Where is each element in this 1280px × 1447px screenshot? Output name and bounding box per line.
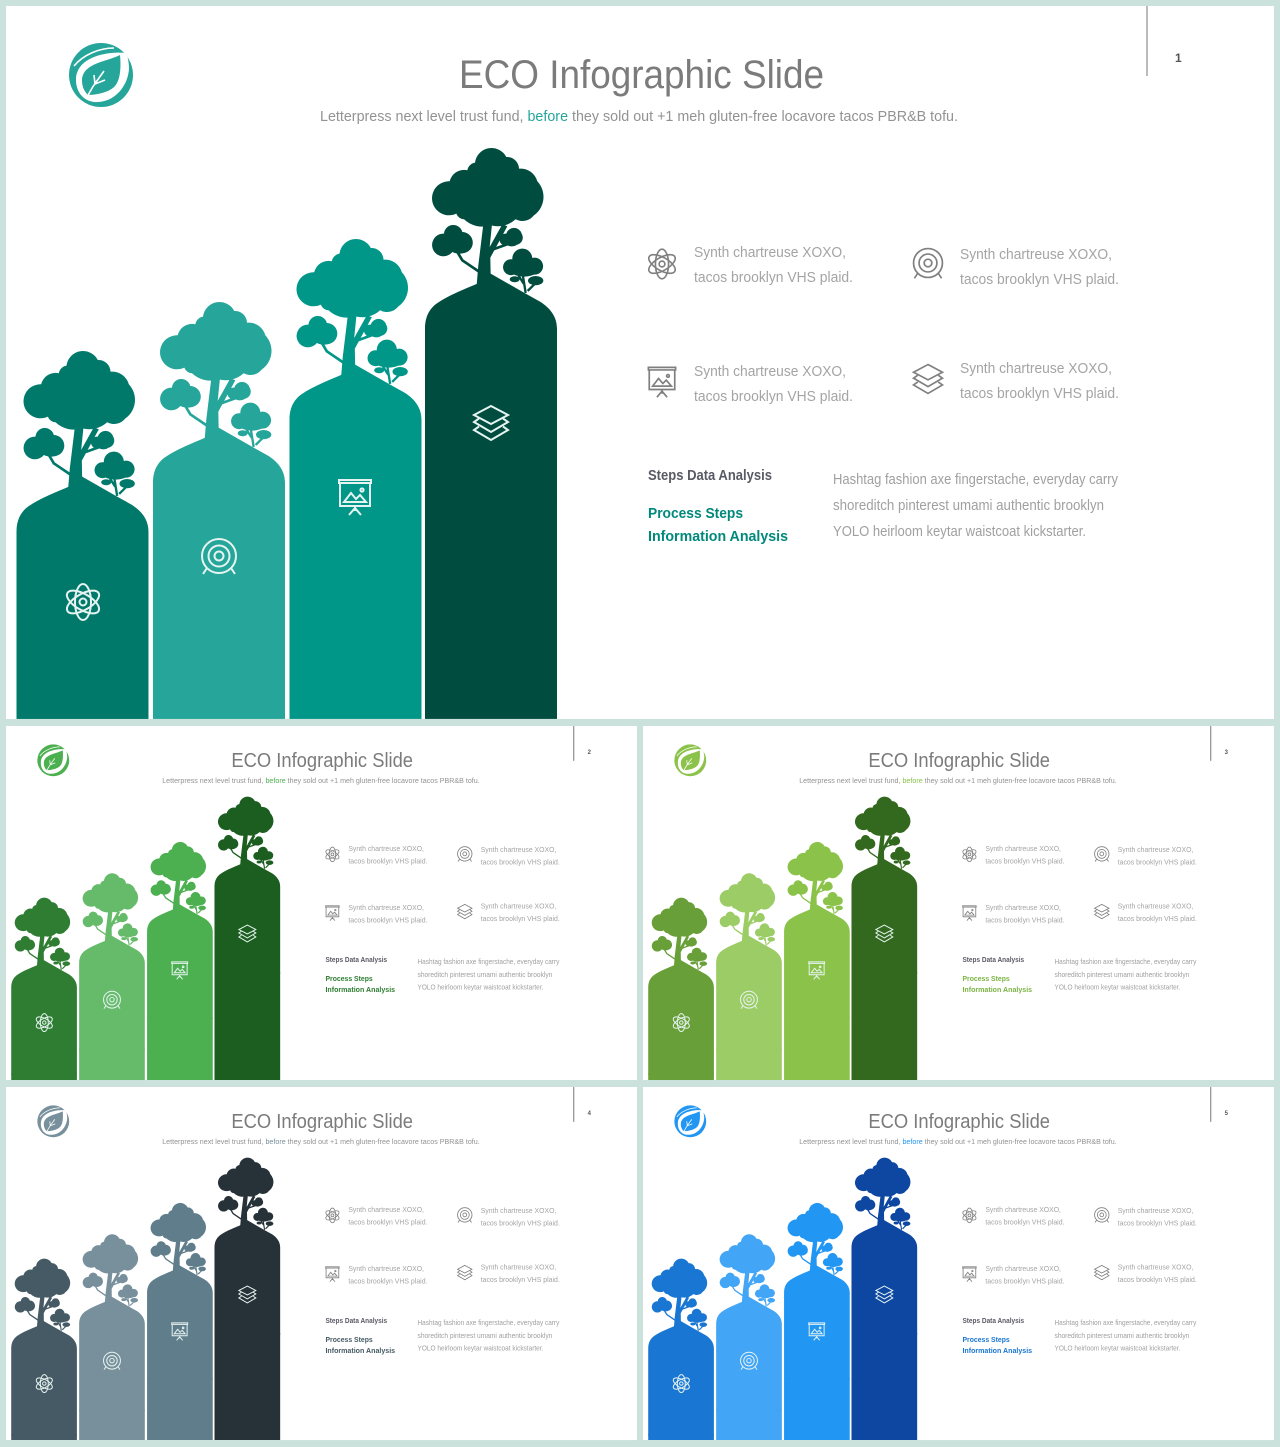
icon: atom (63, 584, 103, 620)
feature: layers item: tacos brooklyn VHS plaid. (1118, 914, 1197, 923)
feature: layers item: Synth chartreuse XOXO, (1118, 1263, 1193, 1272)
analysis headings: Steps Data Analysis (648, 467, 772, 484)
analysis headings: Process Steps (325, 1335, 373, 1344)
feature: presentation item: Synth chartreuse XOXO, (348, 903, 424, 912)
analysis headings: Information Analysis (325, 985, 395, 994)
feature: atom item: tacos brooklyn VHS plaid. (985, 1217, 1064, 1226)
feature: target item: Synth chartreuse XOXO, (1118, 1206, 1193, 1215)
feature: target item (458, 1206, 560, 1227)
feature: atom item (324, 844, 427, 865)
feature: presentation item: tacos brooklyn VHS plaid. (985, 916, 1064, 925)
analysis headings (648, 467, 788, 545)
feature: atom item: tacos brooklyn VHS plaid. (348, 1217, 427, 1226)
icon: layers (876, 925, 893, 942)
bar 4 with tree (214, 797, 280, 1080)
icon: target (741, 1352, 757, 1370)
analysis paragraph: shoreditch pinterest umami authentic brooklyn (833, 497, 1104, 514)
feature: presentation item (963, 903, 1064, 925)
feature: presentation item (648, 363, 853, 405)
analysis headings (962, 1316, 1032, 1355)
feature: layers item (458, 1263, 560, 1284)
icon: presentation (172, 962, 188, 979)
feature: layers item: Synth chartreuse XOXO, (1118, 902, 1193, 911)
bar 2 with tree (716, 1234, 782, 1440)
icon: target (104, 1352, 120, 1370)
subtitle: Letterpress next level trust fund, before they sold out +1 meh gluten-free locavore tacos PBR&B tofu. (162, 776, 480, 785)
analysis headings: Process Steps (962, 1335, 1010, 1344)
feature: target item: Synth chartreuse XOXO, (481, 1206, 556, 1215)
icon: target (202, 539, 236, 574)
analysis headings (325, 1316, 395, 1355)
icon: layers (474, 406, 508, 440)
icon: layers (239, 1286, 256, 1303)
bar 2 with tree (153, 302, 285, 719)
feature: target item: Synth chartreuse XOXO, (481, 845, 556, 854)
feature: atom item: Synth chartreuse XOXO, (348, 1205, 424, 1214)
page number (573, 726, 592, 761)
feature: presentation item (963, 1264, 1064, 1286)
page number: 4 (588, 1111, 592, 1117)
analysis paragraph: Hashtag fashion axe fingerstache, everyday carry (833, 471, 1118, 488)
bar 2 with tree (79, 1234, 145, 1440)
chart: tree bars (16, 148, 557, 719)
feature: atom item: tacos brooklyn VHS plaid. (985, 856, 1064, 865)
analysis paragraph (1055, 1318, 1197, 1353)
bar 1 with tree (648, 898, 714, 1080)
bar 1 with tree (648, 1259, 714, 1440)
feature: target item: tacos brooklyn VHS plaid. (481, 1218, 560, 1227)
panel: blue grey slide (6, 1087, 637, 1440)
feature: target item: tacos brooklyn VHS plaid. (1118, 857, 1197, 866)
analysis paragraph (418, 1318, 560, 1353)
feature: atom item (324, 1205, 427, 1226)
analysis paragraph: YOLO heirloom keytar waistcoat kickstarter. (1055, 1344, 1180, 1353)
feature: atom item: Synth chartreuse XOXO, (694, 244, 846, 261)
page number (573, 1087, 592, 1122)
feature: layers item: Synth chartreuse XOXO, (481, 902, 556, 911)
bar 1 with tree (16, 351, 148, 719)
analysis headings: Steps Data Analysis (325, 955, 387, 964)
title: ECO Infographic Slide (868, 750, 1050, 772)
page number (1210, 726, 1229, 761)
icon: leaf logo (674, 1105, 706, 1137)
feature: layers item (458, 902, 560, 923)
panel: light green slide (643, 726, 1274, 1080)
feature: layers item: tacos brooklyn VHS plaid. (481, 914, 560, 923)
analysis headings: Process Steps (325, 974, 373, 983)
analysis paragraph: shoreditch pinterest umami authentic brooklyn (418, 970, 552, 979)
analysis paragraph: shoreditch pinterest umami authentic brooklyn (418, 1331, 552, 1340)
feature: target item: tacos brooklyn VHS plaid. (1118, 1218, 1197, 1227)
icon: atom (35, 1375, 54, 1393)
analysis headings: Steps Data Analysis (962, 1316, 1024, 1325)
feature: target item: Synth chartreuse XOXO, (1118, 845, 1193, 854)
page number: 5 (1225, 1111, 1229, 1117)
feature: atom item: Synth chartreuse XOXO, (985, 844, 1061, 853)
icon: target (741, 991, 757, 1009)
icon: atom (35, 1014, 54, 1032)
analysis paragraph: Hashtag fashion axe fingerstache, everyday carry (418, 1318, 560, 1327)
feature: presentation item: tacos brooklyn VHS plaid. (348, 1277, 427, 1286)
feature: target item (914, 246, 1119, 288)
analysis paragraph: Hashtag fashion axe fingerstache, everyday carry (418, 957, 560, 966)
feature: atom item (961, 844, 1064, 865)
bar 3 with tree (784, 842, 850, 1080)
analysis paragraph: YOLO heirloom keytar waistcoat kickstarter. (1055, 983, 1180, 992)
feature: atom item: tacos brooklyn VHS plaid. (348, 856, 427, 865)
analysis paragraph: YOLO heirloom keytar waistcoat kickstarter. (418, 1344, 543, 1353)
bar 3 with tree (289, 239, 421, 719)
icon: leaf logo (37, 1105, 69, 1137)
feature: presentation item: tacos brooklyn VHS plaid. (985, 1277, 1064, 1286)
bar 2 with tree (79, 873, 145, 1080)
analysis paragraph (833, 471, 1118, 540)
bar 2 with tree (716, 873, 782, 1080)
feature: target item (1095, 845, 1197, 866)
bar 4 with tree (851, 1158, 917, 1440)
bar 4 with tree (851, 797, 917, 1080)
feature: presentation item: Synth chartreuse XOXO, (985, 903, 1061, 912)
icon: presentation (339, 480, 371, 515)
panel: main teal slide (6, 6, 1274, 719)
bar 1 with tree (11, 1259, 77, 1440)
analysis headings: Steps Data Analysis (962, 955, 1024, 964)
subtitle: Letterpress next level trust fund, before they sold out +1 meh gluten-free locavore tacos PBR&B tofu. (799, 1137, 1117, 1146)
feature: presentation item: Synth chartreuse XOXO, (694, 363, 846, 380)
analysis paragraph (1055, 957, 1197, 992)
feature: atom item (961, 1205, 1064, 1226)
page number: 3 (1225, 750, 1229, 756)
chart: tree bars (11, 797, 280, 1080)
analysis paragraph: YOLO heirloom keytar waistcoat kickstarter. (833, 523, 1086, 540)
panel: blue slide (643, 1087, 1274, 1440)
analysis paragraph: YOLO heirloom keytar waistcoat kickstarter. (418, 983, 543, 992)
icon: leaf logo (69, 43, 133, 107)
bar 4 with tree (425, 148, 557, 719)
feature: presentation item: Synth chartreuse XOXO, (348, 1264, 424, 1273)
bar 3 with tree (784, 1203, 850, 1440)
bar 1 with tree (11, 898, 77, 1080)
title: ECO Infographic Slide (231, 750, 413, 772)
feature: layers item: tacos brooklyn VHS plaid. (481, 1275, 560, 1284)
feature: atom item (646, 244, 853, 286)
icon: presentation (809, 962, 825, 979)
icon: presentation (172, 1323, 188, 1340)
subtitle: Letterpress next level trust fund, before they sold out +1 meh gluten-free locavore tacos PBR&B tofu. (320, 109, 958, 125)
subtitle: Letterpress next level trust fund, before they sold out +1 meh gluten-free locavore tacos PBR&B tofu. (162, 1137, 480, 1146)
bar 4 with tree (214, 1158, 280, 1440)
icon: layers (239, 925, 256, 942)
icon: layers (876, 1286, 893, 1303)
feature: target item: Synth chartreuse XOXO, (960, 246, 1112, 263)
analysis paragraph: shoreditch pinterest umami authentic brooklyn (1055, 970, 1189, 979)
feature: layers item: tacos brooklyn VHS plaid. (1118, 1275, 1197, 1284)
analysis headings: Information Analysis (962, 985, 1032, 994)
analysis paragraph: shoreditch pinterest umami authentic brooklyn (1055, 1331, 1189, 1340)
analysis paragraph: Hashtag fashion axe fingerstache, everyday carry (1055, 957, 1197, 966)
icon: leaf logo (37, 744, 69, 776)
title: ECO Infographic Slide (231, 1111, 413, 1133)
page number (1210, 1087, 1229, 1122)
feature: layers item: Synth chartreuse XOXO, (481, 1263, 556, 1272)
feature: layers item (1095, 1263, 1197, 1284)
panel: green slide (6, 726, 637, 1080)
subtitle: Letterpress next level trust fund, before they sold out +1 meh gluten-free locavore tacos PBR&B tofu. (799, 776, 1117, 785)
page number (1146, 6, 1182, 76)
feature: layers item (1095, 902, 1197, 923)
analysis headings: Information Analysis (325, 1346, 395, 1355)
analysis headings (325, 955, 395, 994)
bar 3 with tree (147, 842, 213, 1080)
title: ECO Infographic Slide (868, 1111, 1050, 1133)
feature: atom item: Synth chartreuse XOXO, (348, 844, 424, 853)
feature: layers item (914, 360, 1119, 402)
feature: presentation item: Synth chartreuse XOXO, (985, 1264, 1061, 1273)
feature: atom item: Synth chartreuse XOXO, (985, 1205, 1061, 1214)
icon: atom (672, 1014, 691, 1032)
feature: target item: tacos brooklyn VHS plaid. (481, 857, 560, 866)
feature: target item (1095, 1206, 1197, 1227)
analysis headings (962, 955, 1032, 994)
feature: target item (458, 845, 560, 866)
icon: presentation (809, 1323, 825, 1340)
bar 3 with tree (147, 1203, 213, 1440)
page number: 2 (588, 750, 592, 756)
feature: presentation item (326, 1264, 427, 1286)
analysis headings: Process Steps (648, 505, 743, 522)
analysis headings: Information Analysis (962, 1346, 1032, 1355)
analysis paragraph: Hashtag fashion axe fingerstache, everyday carry (1055, 1318, 1197, 1327)
analysis headings: Information Analysis (648, 528, 788, 545)
chart: tree bars (11, 1158, 280, 1440)
feature: presentation item: tacos brooklyn VHS plaid. (694, 388, 853, 405)
page number: 1 (1175, 51, 1182, 65)
feature: presentation item (326, 903, 427, 925)
title: ECO Infographic Slide (459, 53, 824, 97)
icon: leaf logo (674, 744, 706, 776)
chart: tree bars (648, 1158, 917, 1440)
feature: atom item: tacos brooklyn VHS plaid. (694, 269, 853, 286)
analysis paragraph (418, 957, 560, 992)
feature: target item: tacos brooklyn VHS plaid. (960, 271, 1119, 288)
icon: target (104, 991, 120, 1009)
feature: layers item: Synth chartreuse XOXO, (960, 360, 1112, 377)
analysis headings: Process Steps (962, 974, 1010, 983)
feature: presentation item: tacos brooklyn VHS plaid. (348, 916, 427, 925)
analysis headings: Steps Data Analysis (325, 1316, 387, 1325)
icon: atom (672, 1375, 691, 1393)
chart: tree bars (648, 797, 917, 1080)
feature: layers item: tacos brooklyn VHS plaid. (960, 385, 1119, 402)
